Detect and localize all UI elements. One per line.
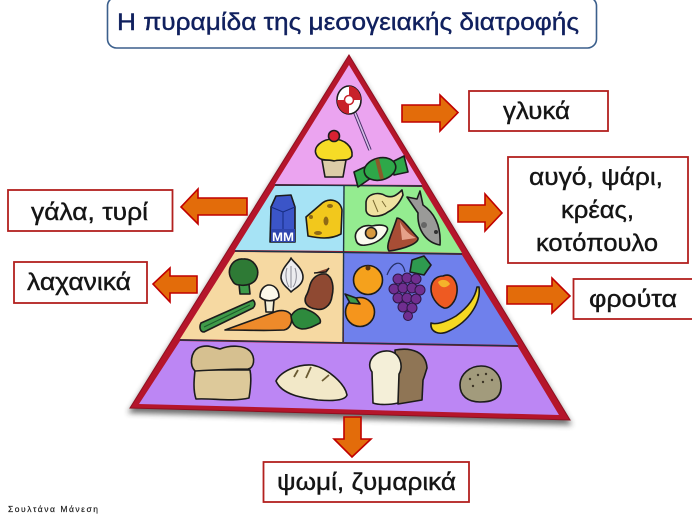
label: dairy: γάλα, τυρί (31, 199, 149, 226)
arrow: protein (458, 194, 502, 231)
arrow: grains (334, 417, 371, 457)
icon: broccoli (229, 259, 258, 294)
icon: lollipop (337, 86, 370, 150)
icon: peach (431, 275, 457, 308)
tier: fruit (344, 253, 518, 345)
label: grains (264, 462, 469, 502)
icon: asparagus (200, 300, 255, 332)
label: protein (508, 157, 688, 263)
icon: milk carton: MM (272, 230, 294, 244)
icon: fried egg (355, 225, 388, 245)
icon: muffin (315, 130, 352, 177)
icon: carrot (225, 308, 320, 330)
signature: Σουλτάνα Μάνεση (8, 504, 98, 514)
icon: oranges (345, 266, 382, 326)
pyramid frame (130, 55, 570, 420)
arrow: dairy (181, 189, 247, 224)
icon: bell pepper (305, 268, 333, 309)
title: Η πυραμίδα της μεσογειακής διατροφής (117, 9, 579, 36)
label: protein: αυγό, ψάρι, (529, 164, 663, 191)
icon: bread roll (460, 366, 501, 402)
label: fruit (574, 279, 692, 319)
icon: chicken (366, 190, 403, 216)
icon: bread loaf (191, 346, 254, 400)
tier: grains (139, 341, 559, 415)
icon: mushroom (260, 285, 279, 312)
arrow: fruit (507, 278, 570, 313)
label: sweets: γλυκά (503, 98, 570, 125)
label: sweets (469, 91, 608, 131)
label: protein: κρέας, (561, 197, 634, 224)
label: protein: κοτόπουλο (536, 230, 658, 257)
pyramid shadow (128, 58, 572, 425)
pyramid (128, 55, 572, 425)
label: vegetables (14, 262, 147, 303)
icon: fish (407, 191, 440, 245)
icon: onion (281, 258, 303, 292)
label: vegetables: λαχανικά (27, 269, 131, 296)
label: fruit: φρούτα (589, 286, 677, 313)
tier: protein (344, 186, 462, 253)
icon: grapes (387, 256, 431, 320)
icon: wrapped candy (354, 154, 408, 187)
icon: milk carton (270, 195, 295, 244)
icon: ham (388, 218, 418, 251)
icon: baguette (276, 365, 347, 400)
tier: sweets (275, 65, 422, 185)
arrow: vegetables (153, 268, 197, 302)
tier dividers (180, 185, 518, 346)
icon: banana (431, 287, 479, 333)
icon: sliced bread (370, 349, 427, 404)
label: dairy (8, 190, 172, 231)
title (108, 0, 596, 48)
icon: cheese (306, 200, 342, 238)
tier: dairy (235, 186, 344, 251)
arrow: sweets (402, 95, 458, 131)
label: grains: ψωμί, ζυμαρικά (277, 469, 456, 496)
tier: vegetables (180, 252, 343, 342)
